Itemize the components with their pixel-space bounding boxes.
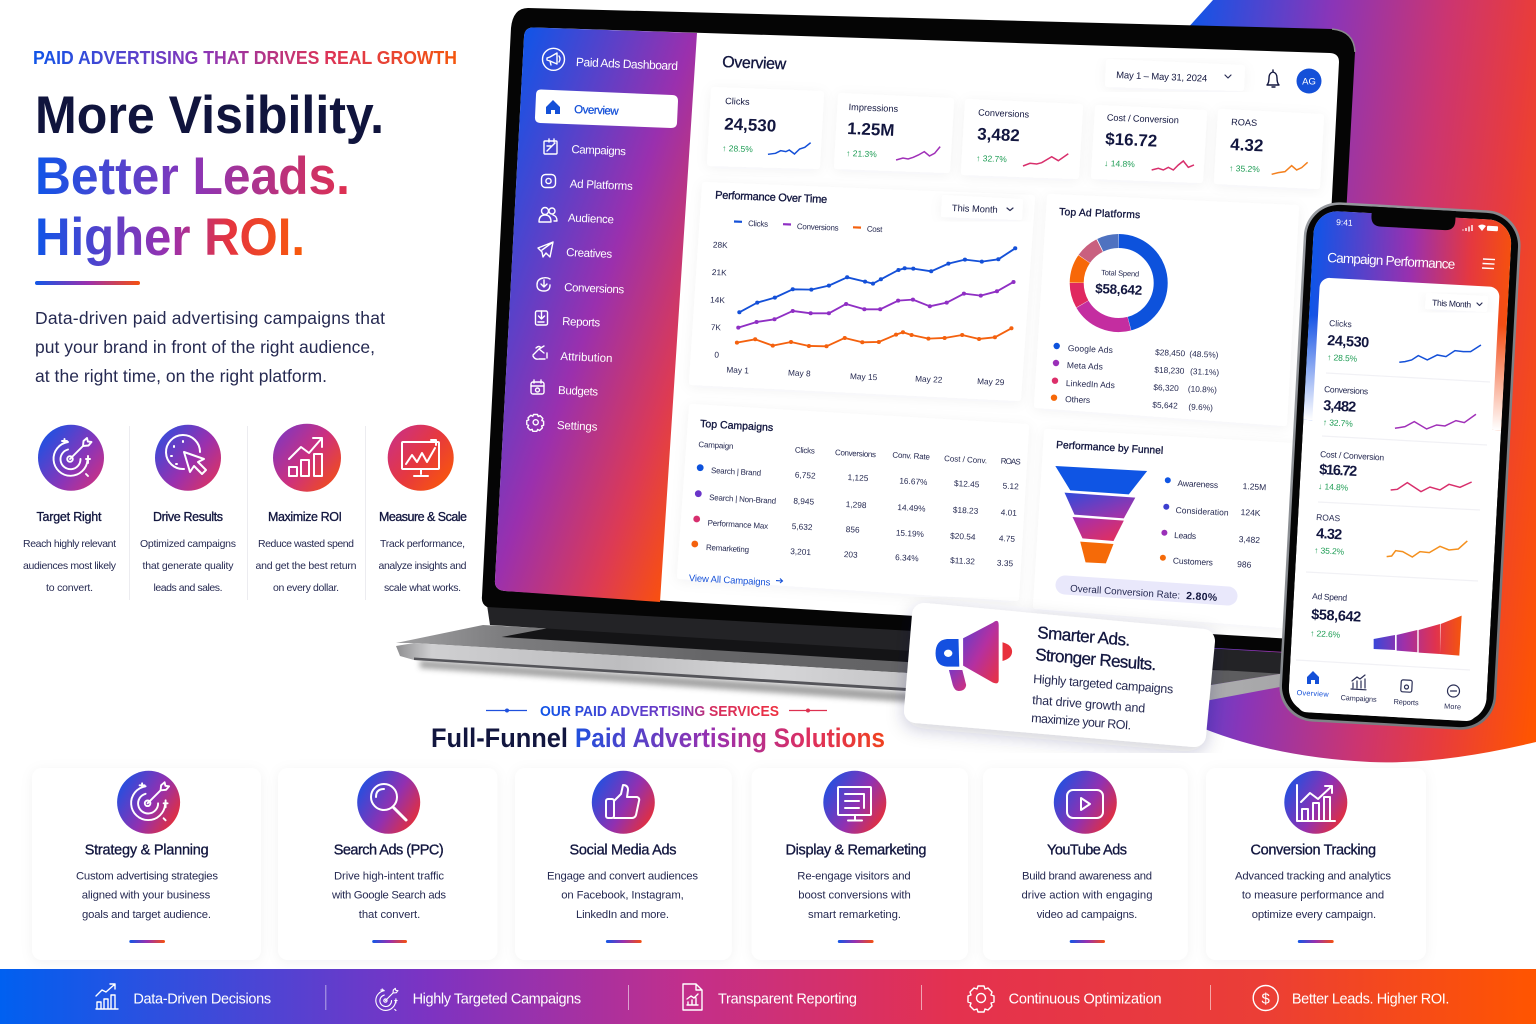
- chart axis labels: 7K: [711, 322, 722, 332]
- line chart: [737, 248, 1015, 346]
- sidebar logo: [542, 48, 678, 73]
- chart legend: Conversions: [797, 222, 839, 233]
- card: strategy and planning: Strategy & Planning: [85, 842, 209, 858]
- nav: ad platforms: [542, 174, 633, 193]
- KPI: ROAS: 4.32: [1230, 135, 1264, 155]
- benefit: drive results: Drive Results: [153, 510, 223, 524]
- KPI cards: [710, 90, 1321, 186]
- KPI: cost per conversion: Cost / Conversion: [1107, 113, 1179, 125]
- donut legend: (31.1%): [1190, 366, 1220, 377]
- phone metric: ad spend: Ad Spend: [1312, 591, 1348, 603]
- KPI: clicks: ↑ 28.5%: [722, 143, 754, 154]
- nav: attribution: [533, 346, 613, 365]
- row: performance max: 5,632: [792, 521, 813, 532]
- left intro block: [33, 48, 457, 386]
- funnel legend: Leads: [1174, 530, 1196, 541]
- footer item: targeted: [376, 988, 581, 1010]
- row: performance max: [693, 516, 1016, 544]
- services title: [431, 723, 885, 753]
- funnel chart: [1055, 466, 1147, 563]
- avatar: [1296, 68, 1322, 94]
- laptop lid: [482, 8, 1355, 674]
- card: conversion tracking: [1206, 768, 1426, 960]
- background gradient shape: [1150, 0, 1536, 762]
- KPI: clicks: [710, 90, 821, 166]
- nav: budgets: [531, 380, 599, 399]
- sidebar: [495, 27, 697, 602]
- bell icon: [1267, 70, 1279, 87]
- laptop: [396, 8, 1355, 704]
- callout text: Highly targeted campaigns: [1033, 672, 1174, 696]
- chart axis labels: May 22: [915, 374, 943, 385]
- phone metric: conversions: 3,482: [1323, 398, 1357, 416]
- table header: Cost / Conv.: [944, 454, 987, 465]
- nav: campaigns: [544, 139, 626, 158]
- footer item: optimization: Continuous Optimization: [1009, 992, 1162, 1008]
- card: search ads: Drive high-intent traffic: [334, 870, 444, 882]
- row: search non-brand: 1,298: [846, 499, 867, 510]
- card: social media ads: Social Media Ads: [570, 842, 676, 858]
- headline underline: [35, 281, 140, 285]
- date picker: May 1 – May 31, 2024: [1116, 70, 1207, 85]
- KPI: conversions: [964, 102, 1080, 176]
- phone metric: ROAS: ROAS: [1316, 512, 1341, 523]
- row: remarketing: Remarketing: [706, 543, 749, 554]
- donut centre label: $58,642: [1095, 281, 1143, 298]
- KPI: ROAS: ↑ 35.2%: [1229, 163, 1261, 174]
- footer band: [0, 969, 1536, 1024]
- phone: [1278, 201, 1522, 731]
- card: search ads: Search Ads (PPC): [334, 842, 444, 858]
- donut legend: $5,642: [1152, 400, 1178, 411]
- benefits row: [23, 424, 467, 600]
- benefit: drive results: [140, 425, 236, 594]
- benefit: maximize ROI: and get the best return: [256, 560, 357, 572]
- row: search brand: $12.45: [954, 478, 980, 489]
- row: search non-brand: [695, 490, 1018, 518]
- table header: ROAS: [1001, 457, 1021, 467]
- benefit: maximize ROI: Maximize ROI: [268, 510, 342, 524]
- conversion rate pill: Overall Conversion Rate:: [1070, 584, 1180, 602]
- benefit: measure and scale: Track performance,: [380, 538, 465, 550]
- phone bottom nav: [1296, 671, 1461, 711]
- services title: Paid Advertising Solutions: [575, 723, 885, 753]
- donut chart: [1060, 225, 1177, 341]
- funnel legend: 3,482: [1239, 534, 1261, 545]
- table header: [698, 440, 1021, 467]
- row: search non-brand: $18.23: [953, 505, 979, 516]
- intro paragraph: put your brand in front of the right audience,: [35, 337, 375, 357]
- table header: Campaign: [698, 440, 734, 451]
- phone metric: cost per conversion: ↓ 14.8%: [1318, 481, 1349, 493]
- nav: audience: Audience: [568, 213, 614, 226]
- nav reports: Reports: [1393, 697, 1419, 707]
- benefit: maximize ROI: on every dollar.: [273, 582, 339, 594]
- row: performance max: Performance Max: [707, 519, 768, 531]
- benefit: maximize ROI: Reduce wasted spend: [258, 538, 354, 550]
- row: remarketing: $11.32: [950, 555, 976, 566]
- benefit: target right: to convert.: [46, 582, 93, 594]
- funnel legend: Customers: [1173, 556, 1213, 567]
- chart axis labels: 14K: [710, 295, 726, 305]
- nav: audience: [539, 208, 614, 226]
- top ad platforms panel: [1037, 197, 1296, 423]
- nav: creatives: [538, 242, 613, 261]
- callout heading: [1035, 623, 1157, 674]
- laptop base shadow: [420, 660, 1205, 704]
- nav: campaigns: Campaigns: [571, 144, 626, 158]
- services eyebrow: OUR PAID ADVERTISING SERVICES: [540, 704, 779, 720]
- callout card: [916, 615, 1203, 735]
- chart axis labels: 28K: [713, 240, 728, 250]
- intro paragraph: at the right time, on the right platform.: [35, 366, 327, 386]
- benefit: target right: Reach highly relevant: [23, 538, 116, 550]
- card: youtube ads: Build brand awareness and: [1022, 870, 1152, 882]
- headline: Better Leads.: [35, 147, 350, 206]
- phone metric: cost per conversion: [1318, 449, 1472, 493]
- row: remarketing: 203: [844, 549, 858, 560]
- nav: attribution: Attribution: [560, 351, 613, 365]
- KPI: impressions: 1.25M: [847, 119, 895, 140]
- card: social media ads: on Facebook, Instagram,: [561, 890, 684, 902]
- donut legend: $28,450: [1155, 347, 1186, 358]
- row: search brand: 5.12: [1002, 481, 1019, 491]
- card: strategy and planning: goals and target audience.: [82, 909, 211, 921]
- row: search brand: 1,125: [847, 472, 869, 483]
- performance over time panel: [692, 185, 1032, 398]
- nav reports: [1393, 680, 1419, 707]
- intro paragraph: Data-driven paid advertising campaigns that: [35, 308, 385, 328]
- icon: megaphone: [936, 621, 1012, 691]
- phone metric: ROAS: [1314, 512, 1467, 557]
- card: youtube ads: drive action with engaging: [1022, 890, 1152, 902]
- nav: conversions: [537, 278, 625, 296]
- table header: Clicks: [795, 446, 815, 456]
- phone metric: clicks: [1327, 318, 1481, 364]
- this month dropdown: [943, 197, 1021, 218]
- donut legend: [1051, 343, 1220, 413]
- benefit: drive results: leads and sales.: [154, 582, 222, 594]
- row: remarketing: 3.35: [997, 558, 1014, 568]
- KPI: clicks: 24,530: [724, 115, 777, 136]
- KPI: impressions: Impressions: [848, 102, 899, 114]
- nav: settings: Settings: [557, 420, 598, 434]
- row: performance max: 15.19%: [896, 528, 925, 539]
- view all link: View All Campaigns: [689, 573, 771, 588]
- nav more: More: [1444, 702, 1461, 711]
- callout text: [1031, 672, 1174, 732]
- funnel legend: [1160, 477, 1266, 570]
- nav: budgets: Budgets: [558, 385, 599, 399]
- top campaigns table panel: [680, 407, 1026, 598]
- footer item: better leads: [1253, 986, 1449, 1010]
- chart axis labels: 21K: [712, 267, 727, 278]
- intro paragraph: [35, 308, 385, 386]
- donut legend: Google Ads: [1068, 343, 1113, 355]
- nav overview: Overview: [1296, 688, 1330, 699]
- sidebar logo: Paid Ads Dashboard: [576, 55, 678, 73]
- nav campaigns: Campaigns: [1340, 693, 1377, 704]
- callout text: that drive growth and: [1032, 693, 1146, 715]
- avatar: AG: [1302, 76, 1316, 88]
- row: search non-brand: 14.49%: [897, 502, 926, 514]
- footer item: better leads: $: [1262, 990, 1271, 1008]
- footer item: reporting: [683, 984, 857, 1010]
- callout heading: Smarter Ads.: [1037, 623, 1131, 650]
- benefit: measure and scale: Measure & Scale: [379, 510, 467, 524]
- row: search non-brand: Search | Non-Brand: [709, 493, 776, 506]
- KPI: impressions: [837, 96, 951, 170]
- funnel legend: Awareness: [1177, 478, 1218, 490]
- card: display and remarketing: Re-engage visitors and: [797, 870, 911, 882]
- card: social media ads: LinkedIn and more.: [576, 909, 669, 921]
- card: search ads: with Google Search ads: [331, 890, 446, 902]
- phone metric: cost per conversion: Cost / Conversion: [1320, 449, 1385, 462]
- nav: ad platforms: Ad Platforms: [569, 179, 633, 193]
- funnel legend: 124K: [1240, 507, 1261, 518]
- phone status bar: 9:41: [1336, 217, 1353, 228]
- card: strategy and planning: Custom advertising strategies: [76, 870, 218, 882]
- card: conversion tracking: optimize every campaign.: [1252, 909, 1376, 921]
- nav: overview active: [535, 90, 678, 128]
- nav campaigns: [1340, 675, 1377, 704]
- nav: conversions: Conversions: [564, 282, 625, 296]
- phone metric: clicks: ↑ 28.5%: [1327, 352, 1358, 364]
- row: performance max: 4.75: [999, 533, 1016, 544]
- benefit: drive results: Optimized campaigns: [140, 538, 236, 550]
- benefit: measure and scale: [378, 425, 467, 594]
- donut legend: $6,320: [1153, 382, 1179, 393]
- card: youtube ads: video ad campaigns.: [1037, 909, 1137, 921]
- donut legend: $18,230: [1154, 365, 1185, 376]
- KPI: conversions: 3,482: [977, 125, 1020, 145]
- overview title: Overview: [722, 54, 787, 73]
- nav overview: [1296, 671, 1330, 699]
- nav: overview active: Overview: [574, 104, 620, 118]
- donut centre label: [1095, 268, 1143, 298]
- phone metric: conversions: Conversions: [1324, 384, 1368, 396]
- benefit: drive results: that generate quality: [142, 560, 234, 572]
- nav: creatives: Creatives: [566, 247, 613, 261]
- chart axis labels: May 8: [788, 368, 811, 379]
- card: youtube ads: YouTube Ads: [1047, 842, 1127, 858]
- footer item: better leads: Better Leads. Higher ROI.: [1292, 992, 1449, 1008]
- phone metric: ad spend: [1310, 591, 1462, 656]
- panel title: Performance Over Time: [715, 190, 827, 206]
- KPI: ROAS: ROAS: [1231, 117, 1257, 128]
- callout text: maximize your ROI.: [1031, 711, 1132, 732]
- chart axis labels: 0: [714, 350, 720, 360]
- donut legend: Others: [1065, 394, 1090, 405]
- card: search ads: [278, 768, 498, 960]
- row: remarketing: 3,201: [790, 546, 812, 557]
- donut legend: (10.8%): [1188, 384, 1217, 395]
- card: search ads: that convert.: [359, 909, 420, 921]
- phone metric: clicks: 24,530: [1327, 333, 1370, 351]
- KPI: conversions: Conversions: [978, 108, 1030, 120]
- nav: reports: Reports: [562, 316, 601, 330]
- performance by funnel panel: [1036, 432, 1293, 625]
- phone frame: [1278, 201, 1522, 731]
- card: display and remarketing: [752, 768, 968, 960]
- benefit: target right: audiences most likely: [23, 560, 117, 572]
- benefit: maximize ROI: [256, 424, 357, 594]
- nav more: [1444, 685, 1461, 711]
- footer item: data-driven: Data-Driven Decisions: [133, 992, 271, 1008]
- headline: More Visibility.: [35, 86, 384, 145]
- headline: [35, 86, 384, 267]
- benefit: target right: Target Right: [36, 510, 102, 524]
- funnel legend: 986: [1237, 559, 1252, 570]
- card: conversion tracking: to measure performance and: [1242, 890, 1384, 902]
- chart axis labels: May 29: [977, 376, 1005, 387]
- row: remarketing: [691, 541, 1014, 568]
- chart axis labels: May 1: [726, 365, 750, 376]
- row: remarketing: 6.34%: [895, 552, 920, 563]
- phone dropdown: This Month: [1432, 298, 1472, 310]
- row: search brand: [697, 464, 1019, 491]
- laptop base: [396, 625, 1285, 701]
- row: search non-brand: 8,945: [793, 496, 815, 507]
- phone header: Campaign Performance: [1327, 250, 1456, 272]
- card: social media ads: Engage and convert audiences: [547, 870, 698, 882]
- funnel legend: 1.25M: [1242, 481, 1266, 492]
- KPI: cost per conversion: [1094, 108, 1204, 180]
- row: performance max: $20.54: [950, 531, 976, 542]
- KPI: clicks: Clicks: [725, 96, 750, 107]
- card: conversion tracking: Advanced tracking and analytics: [1235, 870, 1391, 882]
- card: display and remarketing: smart remarketing.: [808, 909, 901, 921]
- panel title: Top Ad Platforms: [1059, 207, 1140, 221]
- conversion rate pill: 2.80%: [1186, 590, 1218, 604]
- table header: Conversions: [835, 448, 876, 459]
- benefit: measure and scale: analyze insights and: [378, 560, 467, 572]
- this month dropdown: This Month: [952, 203, 998, 215]
- donut legend: LinkedIn Ads: [1066, 378, 1115, 390]
- chart legend: Cost: [867, 225, 883, 234]
- eyebrow: PAID ADVERTISING THAT DRIVES REAL GROWTH: [33, 48, 457, 68]
- chart legend: Clicks: [748, 219, 768, 229]
- benefit: measure and scale: scale what works.: [384, 582, 461, 594]
- dashboard screen: [495, 27, 1339, 640]
- row: search non-brand: 4.01: [1001, 507, 1018, 518]
- donut legend: Meta Ads: [1067, 360, 1103, 372]
- KPI: impressions: ↑ 21.3%: [846, 148, 878, 159]
- card: strategy and planning: [32, 768, 261, 960]
- service cards: [32, 768, 1426, 960]
- phone metric: conversions: ↑ 32.7%: [1323, 417, 1354, 429]
- KPI: cost per conversion: $16.72: [1105, 130, 1158, 151]
- phone metric: ROAS: 4.32: [1316, 526, 1343, 543]
- phone metric: ad spend: ↑ 22.6%: [1310, 628, 1341, 640]
- footer item: reporting: Transparent Reporting: [718, 992, 857, 1008]
- row: performance max: 856: [846, 524, 860, 535]
- card: strategy and planning: aligned with your business: [82, 890, 211, 902]
- card: youtube ads: [983, 768, 1188, 960]
- KPI: conversions: ↑ 32.7%: [976, 153, 1008, 164]
- callout heading: Stronger Results.: [1035, 645, 1157, 674]
- footer item: optimization: [968, 986, 1162, 1012]
- donut centre label: Total Spend: [1101, 268, 1139, 279]
- phone metric: cost per conversion: $16.72: [1319, 462, 1358, 480]
- table title: Top Campaigns: [700, 418, 773, 434]
- KPI: cost per conversion: ↓ 14.8%: [1104, 158, 1136, 169]
- chart axis labels: May 15: [850, 371, 878, 382]
- chart axis labels: [710, 240, 1005, 387]
- table header: Conv. Rate: [892, 451, 931, 462]
- phone status bar: [1336, 217, 1498, 232]
- funnel legend: Consideration: [1175, 505, 1229, 518]
- footer item: targeted: Highly Targeted Campaigns: [413, 992, 581, 1008]
- footer item: data-driven: [96, 984, 271, 1009]
- phone metric: clicks: Clicks: [1329, 318, 1352, 329]
- phone metric: conversions: [1323, 384, 1476, 429]
- card: display and remarketing: boost conversions with: [798, 890, 911, 902]
- phone metric: ROAS: ↑ 35.2%: [1314, 545, 1345, 557]
- date picker: [1108, 62, 1242, 88]
- KPI: ROAS: [1217, 112, 1321, 186]
- nav: settings: [527, 414, 598, 434]
- card: display and remarketing: Display & Remarketing: [786, 842, 926, 858]
- phone dropdown: [1427, 295, 1486, 310]
- conversion rate pill: [1065, 584, 1228, 604]
- dashboard header: [722, 54, 1322, 94]
- row: search brand: Search | Brand: [711, 466, 761, 478]
- card: conversion tracking: Conversion Tracking: [1251, 842, 1376, 858]
- benefit: target right: [23, 425, 117, 594]
- row: search brand: 16.67%: [899, 476, 928, 487]
- phone metric: ad spend: $58,642: [1311, 607, 1362, 626]
- panel title: Performance by Funnel: [1056, 440, 1163, 457]
- donut legend: (9.6%): [1188, 402, 1213, 413]
- chart legend: [734, 219, 883, 234]
- nav: reports: [536, 311, 601, 330]
- services heading: [431, 704, 885, 753]
- card: social media ads: [515, 768, 732, 960]
- services title: Full-Funnel: [431, 723, 568, 753]
- donut legend: (48.5%): [1189, 349, 1219, 360]
- row: search brand: 6,752: [795, 470, 816, 481]
- headline: Higher ROI.: [35, 208, 305, 267]
